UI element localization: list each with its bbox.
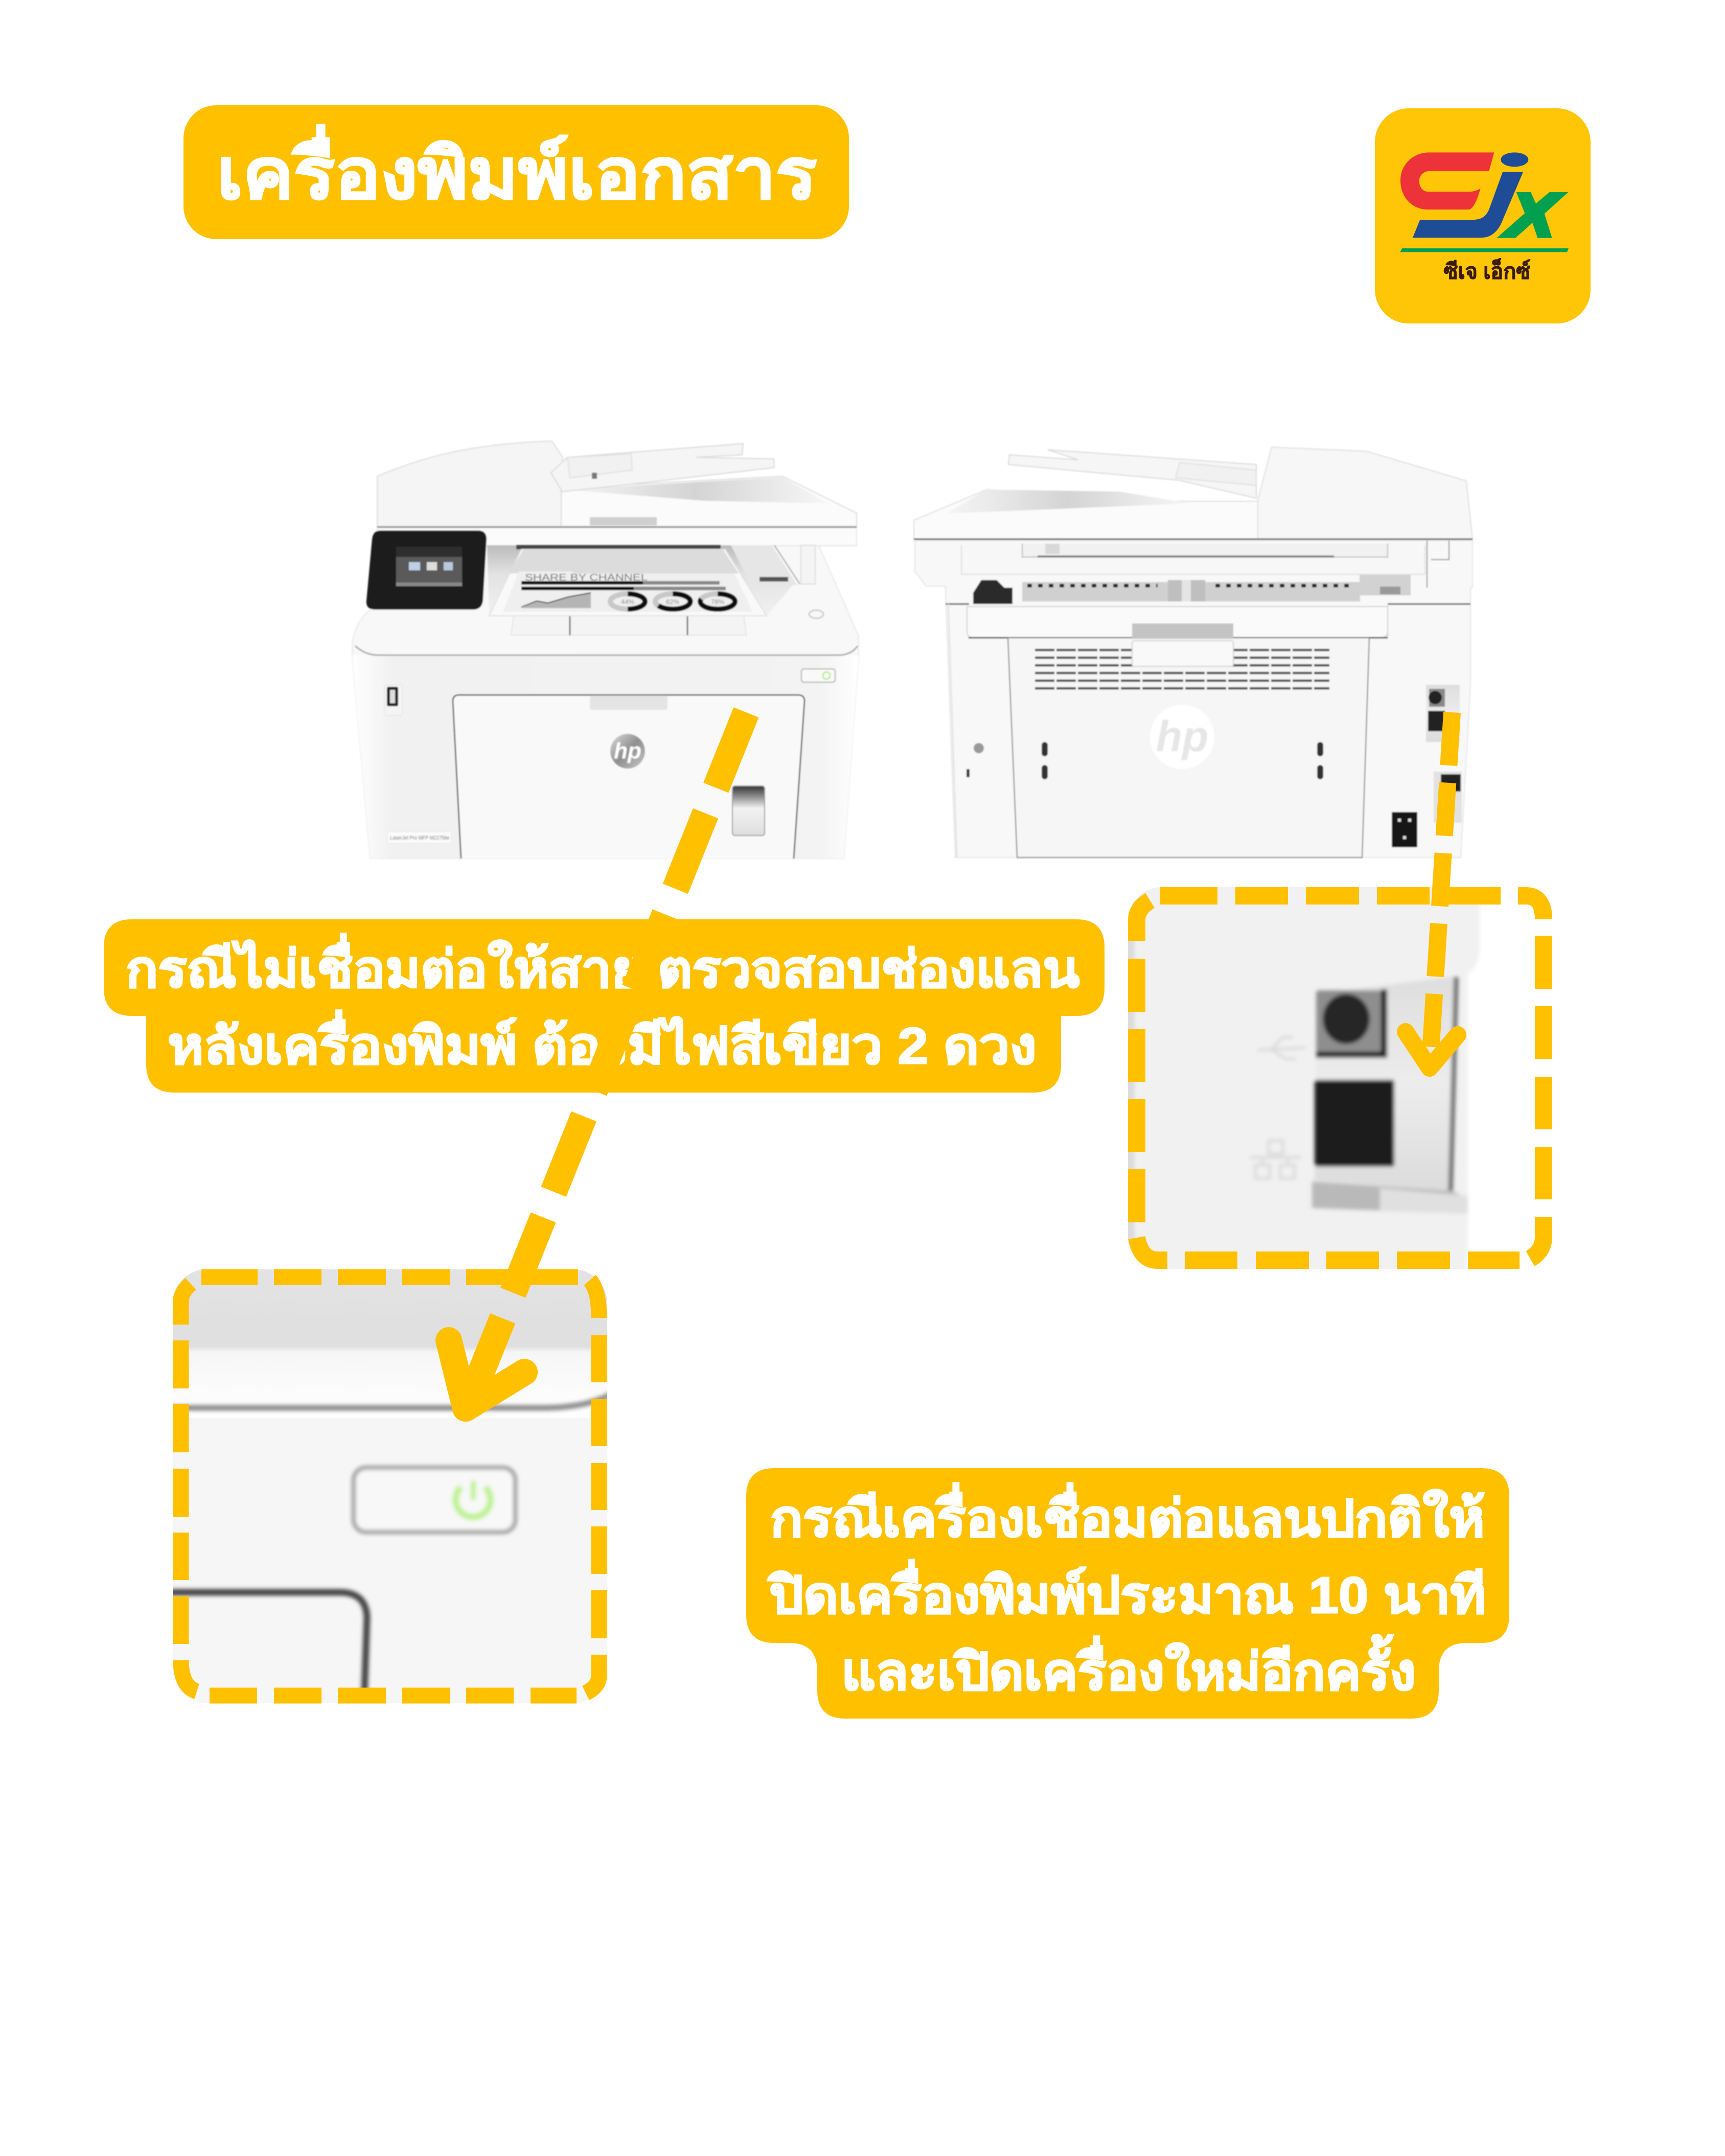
power icon: [456, 1481, 491, 1517]
dashed frame left: [181, 1277, 599, 1696]
rear ports: [1426, 685, 1462, 823]
USB port: [1316, 989, 1386, 1057]
printed page: 78%: [711, 598, 724, 606]
power button outline: [354, 1468, 515, 1532]
paper path strip: [973, 575, 1411, 604]
callout: restart printer: [746, 1468, 1509, 1719]
callout: restart printer: ปิดเครื่องพิมพ์ประมาณ 10 นาที: [767, 1559, 1486, 1624]
printed page: 44%: [621, 598, 634, 606]
printed page: 62%: [666, 598, 679, 606]
callout: cable check: [104, 919, 1105, 1093]
printed page: SHARE BY CHANNEL: [525, 572, 648, 583]
rear door: [967, 607, 1388, 857]
callout: restart printer: และเปิดเครื่องใหม่อีกครั้ง: [841, 1634, 1416, 1701]
arrow: power light: [449, 712, 746, 1415]
recessed port bay: [1315, 976, 1457, 1191]
HP logo front: [610, 734, 645, 769]
scanner lid and document feeder: [377, 441, 857, 546]
USB symbol: [1257, 1037, 1306, 1059]
logo: CJx: ซีเจ เอ็กซ์: [1443, 258, 1530, 283]
output cavity: [487, 545, 795, 616]
rear handle: [1132, 623, 1233, 666]
power button front: [801, 669, 835, 682]
ethernet port: [1315, 1080, 1394, 1167]
printer edge line: [169, 1393, 613, 1408]
rear holes: [1045, 745, 1320, 776]
printer rear photo: [914, 447, 1473, 857]
output tray lip: [511, 616, 746, 635]
printer front photo: [352, 441, 859, 859]
feeder and trays rear: [914, 447, 1473, 539]
title: เครื่องพิมพ์เอกสาร: [217, 124, 817, 214]
door: [453, 695, 804, 859]
callout: cable check: กรณีไม่เชื่อมต่อให้สาย ตรวจสอบช่องแลน: [126, 933, 1079, 998]
network symbol: [1250, 1141, 1301, 1178]
logo: CJx: [1375, 108, 1591, 323]
USB port front: [384, 685, 402, 715]
printed page: [489, 549, 767, 616]
rear body: [915, 541, 1473, 857]
printer body: [352, 542, 859, 859]
callout: cable check: หลังเครื่องพิมพ์ ต้องมีไฟสีเขียว 2 ดวง: [168, 1010, 1037, 1075]
arrow: network port: [1406, 712, 1458, 1068]
panel: zoomed power button: [169, 1269, 613, 1707]
paper door corner: [169, 1592, 367, 1707]
model label: LaserJet Pro MFP M227fdw: [390, 835, 449, 841]
dashed frame right: [1137, 896, 1544, 1260]
paper level window: [732, 786, 765, 836]
HP logo rear: [1150, 705, 1214, 769]
power socket: [1392, 812, 1417, 847]
panel: zoomed network ports: [1124, 884, 1559, 1272]
touch screen: [366, 530, 487, 610]
knob and lock: [967, 743, 984, 777]
title: [183, 105, 849, 239]
HP logo rear: hp: [1156, 712, 1208, 760]
callout: restart printer: กรณีเครื่องเชื่อมต่อแลนปกติให้: [770, 1482, 1485, 1547]
model label: [388, 832, 451, 843]
HP logo front: hp: [614, 738, 641, 763]
vents: [1035, 650, 1329, 688]
